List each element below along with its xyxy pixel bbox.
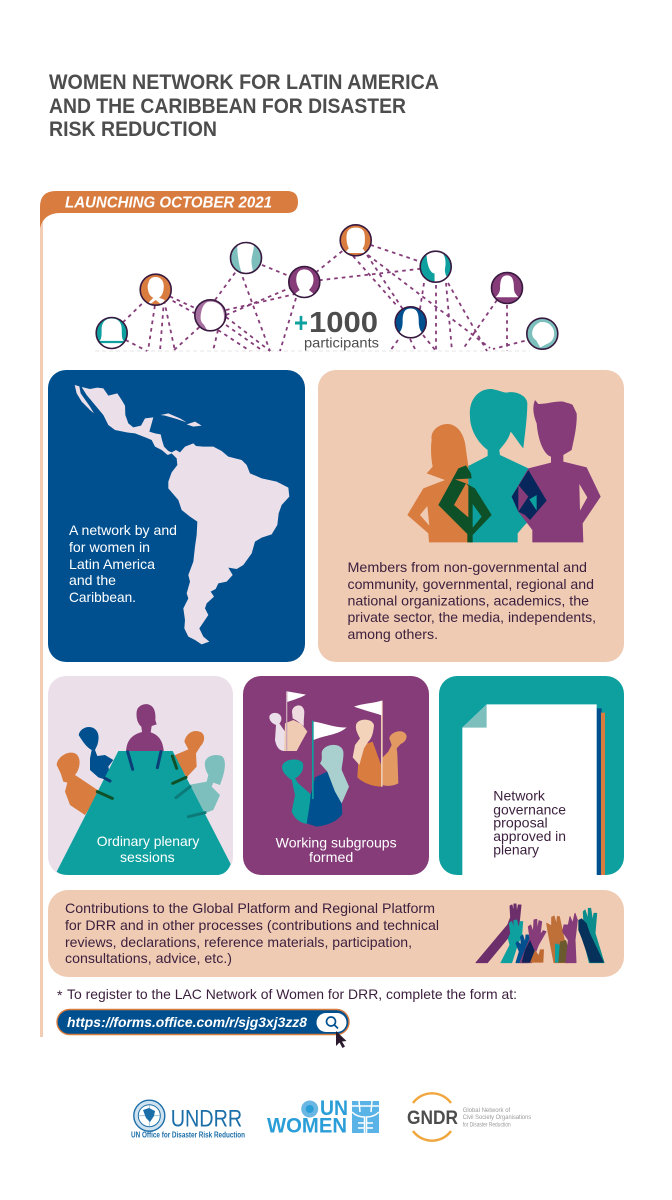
logo: UNDRR	[131, 1100, 245, 1139]
members text: among others.	[348, 626, 438, 642]
governance text	[493, 788, 566, 857]
logo: UNDRR: UNDRR	[171, 1106, 242, 1133]
panel: contributions	[48, 890, 624, 977]
members text	[348, 559, 596, 642]
registration note: To register to the LAC Network of Women for DRR, complete the form at:	[67, 986, 517, 1002]
logo: UNDRR: UN Office for Disaster Risk Reduction	[131, 1130, 245, 1139]
subgroups label: Working subgroups	[276, 834, 397, 850]
node: teal right	[420, 251, 451, 283]
illustration: groups with flags	[269, 691, 407, 827]
logo: GNDR: GNDR	[407, 1108, 458, 1129]
participants count: 1000	[309, 307, 378, 339]
node: orange top	[340, 225, 371, 256]
icon: magnifier	[326, 1017, 338, 1028]
illustration: meeting table	[57, 704, 231, 875]
contributions text: Contributions to the Global Platform and Regional Platform	[65, 900, 435, 916]
logo: UN Women: UN	[320, 1097, 348, 1120]
url search bar	[57, 1010, 349, 1048]
map caption: A network by and	[69, 522, 177, 538]
node: orange	[140, 274, 171, 305]
panel: plenary sessions	[48, 676, 233, 875]
members text: private sector, the media, independents,	[348, 609, 596, 625]
plenary label: Ordinary plenary	[97, 833, 199, 849]
plenary label	[97, 833, 199, 865]
governance text: Network	[493, 788, 546, 804]
title	[49, 71, 439, 141]
panel: governance proposal	[439, 676, 624, 875]
logo: UN Women: WOMEN	[267, 1115, 347, 1138]
governance text: governance	[493, 801, 566, 817]
url search bar: https://forms.office.com/r/sjg3xj3zz8	[67, 1014, 307, 1030]
map caption: Latin America	[69, 556, 155, 572]
plenary label: sessions	[120, 849, 175, 865]
governance text: plenary	[493, 841, 539, 857]
node: light teal	[230, 242, 262, 276]
members text: national organizations, academics, the	[348, 592, 589, 608]
panel: network map	[48, 370, 305, 662]
launch banner: LAUNCHING OCTOBER 2021	[65, 194, 272, 212]
participants network	[95, 225, 558, 351]
members text: Members from non-governmental and	[348, 559, 587, 575]
logo: GNDR	[407, 1093, 532, 1141]
launch banner	[40, 191, 298, 228]
node: light teal right	[527, 318, 558, 349]
timeline rail	[40, 222, 43, 1037]
participants count: +	[294, 307, 308, 338]
contributions text	[65, 900, 439, 966]
governance text: approved in	[493, 828, 566, 844]
icon: cursor	[336, 1031, 346, 1048]
map caption: Caribbean.	[69, 589, 136, 605]
logo: GNDR: Civil Society Organisations	[463, 1114, 532, 1121]
panel: members	[318, 370, 624, 662]
logo: GNDR: Global Network of	[463, 1107, 510, 1114]
registration note: *	[57, 987, 63, 1003]
title: RISK REDUCTION	[49, 118, 217, 141]
node: purple right	[492, 272, 522, 304]
contributions text: for DRR and in other processes (contributions and technical	[65, 917, 439, 933]
contributions text: reviews, declarations, reference materials, participation,	[65, 934, 412, 950]
node: blue	[395, 307, 426, 338]
illustration: three people	[407, 389, 601, 542]
logo: UN Women	[267, 1097, 379, 1138]
members text: community, governmental, regional and	[348, 576, 594, 592]
governance text: proposal	[493, 815, 548, 831]
node: purple	[289, 266, 320, 300]
illustration: document	[462, 704, 605, 875]
participants count: participants	[304, 334, 379, 350]
infographic	[40, 74, 624, 1142]
map caption: for women in	[69, 539, 150, 555]
subgroups label: formed	[309, 849, 353, 865]
logo: GNDR: for Disaster Reduction	[463, 1122, 511, 1128]
node: teal	[96, 318, 127, 351]
participants count	[294, 307, 379, 350]
title: AND THE CARIBBEAN FOR DISASTER	[49, 95, 406, 118]
map caption	[69, 522, 177, 605]
subgroups label	[276, 834, 397, 865]
map caption: and the	[69, 572, 116, 588]
title: WOMEN NETWORK FOR LATIN AMERICA	[49, 71, 439, 94]
contributions text: consultations, advice, etc.)	[65, 950, 232, 966]
panel: working subgroups	[243, 676, 429, 875]
illustration: raised hands	[476, 904, 604, 963]
node: mauve	[195, 300, 226, 332]
map of Latin America	[75, 385, 289, 644]
